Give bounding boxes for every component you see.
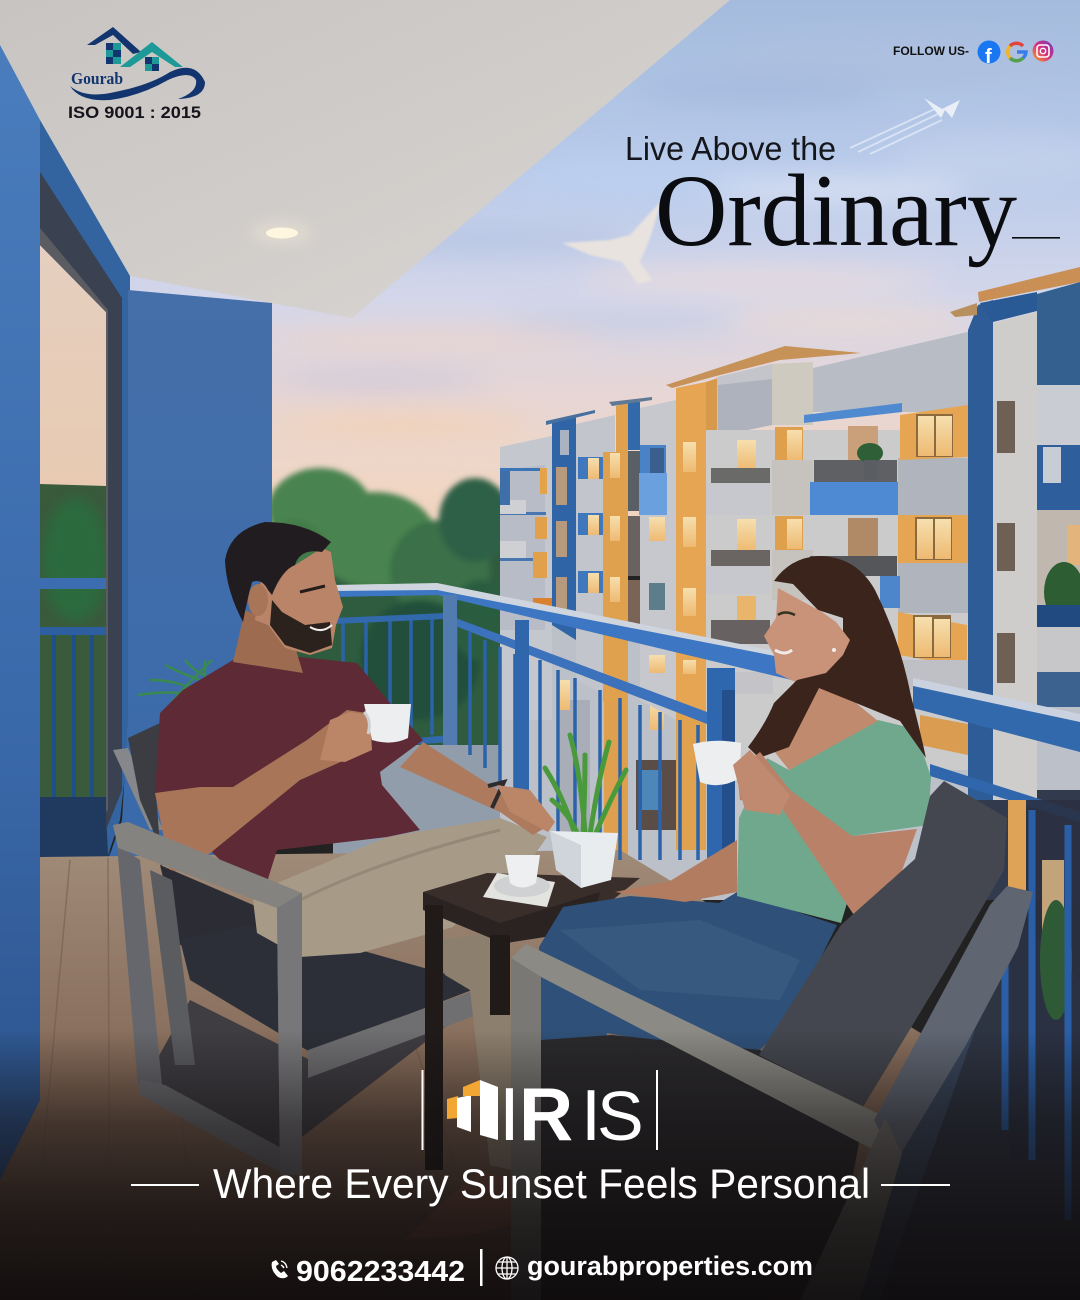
- centre-left wing: [639, 400, 676, 720]
- woman's chair seat: [541, 1035, 865, 1300]
- dark gradient at bottom: [0, 1030, 1080, 1300]
- man's shirt: [155, 657, 423, 882]
- website: gourabproperties.com: [527, 1251, 813, 1281]
- hair: [225, 522, 331, 622]
- woman's chair frame: [511, 886, 1033, 1300]
- grey back cushion: [759, 781, 1007, 1107]
- posts: [443, 595, 457, 745]
- window opening on left balcony wall: [40, 245, 110, 857]
- far-left wing: [500, 436, 553, 720]
- woman's jeans: [539, 892, 837, 1120]
- neck: [233, 610, 303, 673]
- woman's face: [764, 588, 850, 681]
- left span base: [395, 735, 450, 746]
- top rail highlight: [333, 583, 780, 657]
- follow us row: [893, 40, 1054, 68]
- logo roofs and windows: [87, 27, 183, 71]
- headline first line: Live Above the: [625, 130, 836, 167]
- man's head: [225, 522, 343, 673]
- left blue wall: [0, 45, 40, 1180]
- company logo: [68, 27, 205, 122]
- project name: I: [581, 1076, 601, 1156]
- table: [423, 873, 640, 1170]
- back frame: [113, 748, 163, 830]
- project name: S: [597, 1077, 644, 1155]
- base rail: [140, 1080, 285, 1175]
- distant tree line: [261, 468, 512, 750]
- right tower: [950, 267, 1080, 800]
- icon: facebook: [978, 40, 1000, 68]
- headline second line: Ordinary: [655, 154, 1017, 268]
- woman's sleeve and arm with cup: [693, 741, 917, 918]
- logo wordmark: Gourab: [71, 69, 123, 88]
- seat back: [160, 865, 265, 945]
- balusters: [343, 615, 698, 860]
- project name: R: [519, 1072, 573, 1156]
- phone number: 9062233442: [296, 1256, 465, 1288]
- blue balcony railing: [333, 583, 1080, 1220]
- sky background: [0, 0, 1080, 540]
- icon: facebook: f: [985, 46, 992, 68]
- apartment building: [500, 267, 1080, 800]
- lower rail, main span: [445, 614, 707, 724]
- face: [255, 548, 343, 655]
- window frame and side wall: [40, 120, 130, 855]
- man's chair arm and post: [113, 822, 302, 1175]
- tagline text: Where Every Sunset Feels Personal: [213, 1160, 870, 1207]
- ceiling lamp: [252, 221, 312, 245]
- ear: [248, 584, 268, 616]
- woman's shirt: [737, 720, 931, 923]
- icon: google: [1008, 43, 1026, 61]
- dove: [562, 200, 662, 284]
- airplane and contrails: [850, 98, 960, 154]
- second floor band: [706, 515, 968, 613]
- IRIS project logo: [422, 1070, 658, 1156]
- ceiling: [0, 0, 730, 318]
- orange column: [676, 378, 718, 710]
- icon: phone: [272, 1260, 288, 1278]
- woman's coffee cup: [693, 741, 741, 785]
- wooden balcony floor: [0, 850, 1080, 1300]
- back cushion: [128, 723, 162, 870]
- building mark: [447, 1080, 498, 1140]
- ISO certification: ISO 9001 : 2015: [68, 103, 201, 122]
- saucer and small cup: [483, 855, 555, 907]
- follow us label: FOLLOW US-: [893, 46, 969, 58]
- man's raised arm holding cup: [155, 704, 411, 872]
- lower rail, left span: [333, 613, 445, 624]
- project name: I: [499, 1072, 520, 1156]
- woman's chest and neck: [774, 677, 878, 770]
- first floor band: [706, 403, 970, 516]
- beard: [270, 600, 332, 653]
- lower storeys and ground behind railing: [333, 600, 1080, 900]
- logo swoosh: [70, 68, 205, 100]
- man's chair, back: [113, 723, 490, 1175]
- blue stair tower, left: [546, 410, 595, 640]
- blue pillar: [108, 290, 272, 860]
- man's foot: [404, 1170, 512, 1240]
- man's coffee cup: [364, 704, 411, 743]
- top rail, main span: [333, 584, 800, 682]
- mid wing: [576, 397, 652, 702]
- fern plant: [138, 660, 212, 718]
- rear leg: [117, 845, 162, 1085]
- seat cushion: [180, 925, 485, 1052]
- right span: [913, 679, 1080, 752]
- woman's hair: [748, 556, 926, 758]
- icon: instagram: [1032, 40, 1054, 62]
- icon: globe: [496, 1257, 518, 1279]
- headline: [625, 130, 1060, 268]
- third floor band: [711, 596, 968, 755]
- man's right arm: [400, 742, 555, 835]
- plant in white pot: [545, 735, 626, 888]
- upper wall and brick block: [706, 330, 976, 770]
- woman's left arm on table: [615, 840, 737, 902]
- man's pants: [253, 818, 547, 1170]
- contact row: [272, 1249, 813, 1288]
- main roof: [666, 346, 861, 388]
